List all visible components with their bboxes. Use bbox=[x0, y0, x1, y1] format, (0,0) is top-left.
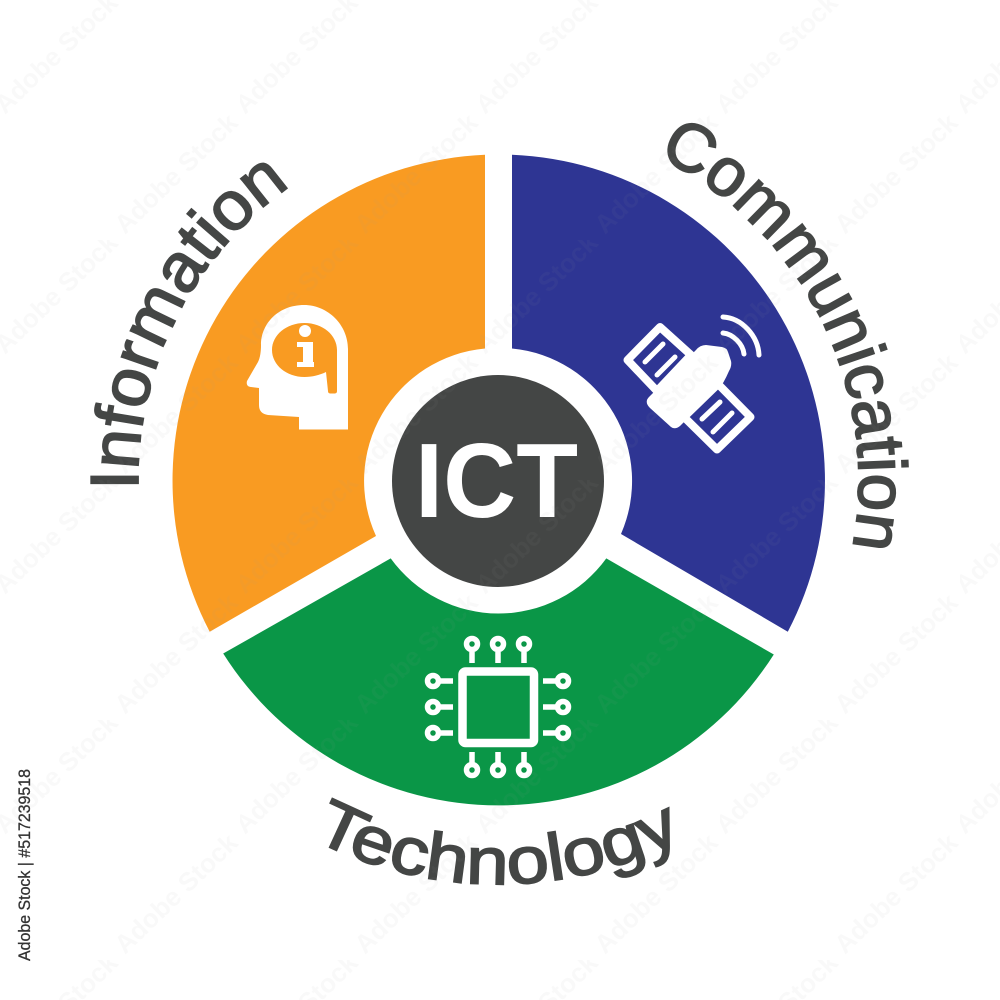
panel: communication segment bbox=[512, 155, 825, 632]
label: Information: Information bbox=[90, 162, 288, 484]
center circle with ICT title bbox=[392, 375, 604, 587]
label: Technology: Technology bbox=[328, 797, 670, 886]
stock number text: Adobe Stock | #517239518 bbox=[15, 769, 34, 961]
icon: microchip bbox=[428, 638, 568, 776]
label: Communication: Communication bbox=[667, 122, 909, 548]
panel: information segment bbox=[173, 155, 485, 632]
icon: satellite bbox=[628, 317, 759, 450]
icon: head with info symbol bbox=[247, 305, 348, 430]
panel: technology segment bbox=[223, 558, 774, 805]
center circle with ICT title: ICT bbox=[415, 422, 578, 540]
